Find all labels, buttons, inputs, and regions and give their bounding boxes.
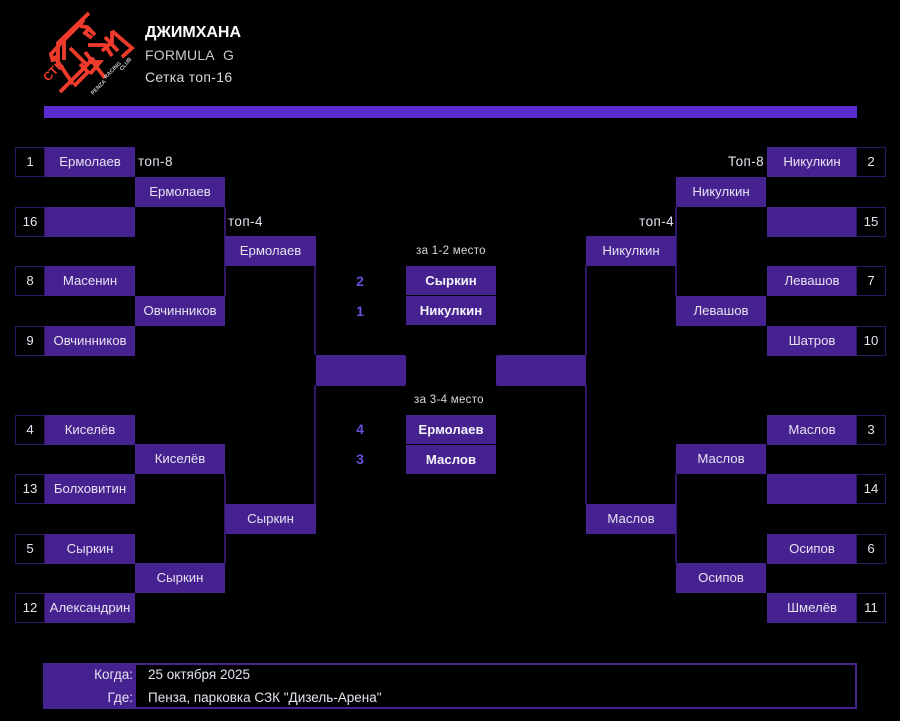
match: seed 7: Левашов <box>784 273 840 288</box>
round 2 winner <box>676 444 766 474</box>
semifinalist <box>586 236 676 266</box>
finalist: Nikulkin: Никулкин <box>420 302 482 318</box>
round 2 winner <box>676 177 766 207</box>
round 2 winner <box>135 296 225 326</box>
info labels: Где: <box>107 690 133 705</box>
finalist slot left <box>316 355 406 386</box>
match: seed 2: Никулкин <box>783 154 841 169</box>
right bracket: 15 <box>864 214 878 229</box>
left bracket: Ермолаев <box>59 154 121 169</box>
match: seed 12 <box>15 593 45 623</box>
left bracket: Масенин <box>63 273 117 288</box>
place 3: 3 <box>356 451 364 467</box>
finalist: Syrkin <box>406 266 496 295</box>
semifinalist <box>225 236 316 266</box>
match: seed 4: 4 <box>26 422 34 437</box>
logo: STK Penza Racing Club: RACING <box>103 61 123 80</box>
panel: final for places 1-2 <box>356 245 496 325</box>
right bracket: 7 <box>867 273 875 288</box>
match: seed 9 <box>15 326 45 356</box>
label: third place: за 3-4 место <box>414 394 484 406</box>
match: seed 1 <box>15 147 45 177</box>
match: seed 16: 16 <box>23 214 37 229</box>
match: seed 10: Шатров <box>789 333 835 348</box>
match: seed 9: 9 <box>26 333 34 348</box>
right bracket: 2 <box>867 154 875 169</box>
right bracket <box>586 147 886 623</box>
finalist: Nikulkin <box>406 296 496 325</box>
left bracket: Овчинников <box>53 333 127 348</box>
bracket connector lines right <box>675 207 677 563</box>
match: seed 3 <box>767 415 857 445</box>
info labels: Когда: <box>94 667 133 682</box>
match: seed 6: Осипов <box>789 541 835 556</box>
round 2 winner <box>676 296 766 326</box>
place 1: 1 <box>356 303 364 319</box>
semifinalist <box>586 504 676 534</box>
place 2: 2 <box>356 273 364 289</box>
left bracket: Киселёв <box>65 422 115 437</box>
round 2 winner <box>135 563 225 593</box>
match: seed 7 <box>767 266 857 296</box>
match: seed 14 <box>767 474 857 504</box>
semifinalist <box>225 504 316 534</box>
round 2 winner: Сыркин <box>157 570 203 585</box>
logo: STK Penza Racing Club: PENZA <box>90 79 108 96</box>
left bracket: Сыркин <box>67 541 113 556</box>
place 4: 4 <box>356 421 364 437</box>
panel: event info <box>43 663 857 709</box>
round 2 winner <box>676 563 766 593</box>
semifinalist: Сыркин <box>247 511 294 526</box>
match: seed 13: 13 <box>23 481 37 496</box>
label: top-8: Топ-8 <box>728 154 764 169</box>
match: seed 8: 8 <box>26 273 34 288</box>
match: seed 5: 5 <box>26 541 34 556</box>
label: final: за 1-2 место <box>416 245 486 257</box>
match: seed 15 <box>767 207 857 237</box>
match: seed 2 <box>767 147 857 177</box>
match: seed 3: Маслов <box>788 422 836 437</box>
right bracket: 14 <box>864 481 878 496</box>
venue: Пенза, парковка СЗК "Дизель-Арена" <box>148 690 382 705</box>
match: seed 13 <box>15 474 45 504</box>
subtitle: FORMULA G <box>145 47 234 63</box>
round 2 winner <box>135 444 225 474</box>
finalist: Ermolaev <box>406 415 496 444</box>
round 2 winner: Никулкин <box>692 184 750 199</box>
right bracket: 6 <box>867 541 875 556</box>
match: seed 1: 1 <box>26 154 34 169</box>
label: top-4: топ-4 <box>639 214 674 229</box>
match: seed 10 <box>767 326 857 356</box>
match: seed 5 <box>15 534 45 564</box>
panel: match for places 3-4 <box>356 394 496 474</box>
match: seed 16 <box>15 207 45 237</box>
logo: STK Penza Racing Club <box>40 12 135 96</box>
label: top-8: топ-8 <box>138 154 173 169</box>
match: seed 6 <box>767 534 857 564</box>
logo: STK Penza Racing Club: CLUB <box>119 57 133 72</box>
semifinalist: Никулкин <box>602 243 660 258</box>
match: seed 11 <box>767 593 857 623</box>
match: seed 4 <box>15 415 45 445</box>
right bracket: 10 <box>864 333 878 348</box>
label: top-4: топ-4 <box>228 214 263 229</box>
right bracket: 11 <box>864 600 878 615</box>
match: seed 11: Шмелёв <box>787 600 837 615</box>
finalist: Maslov <box>406 445 496 474</box>
round 2 winner: Ермолаев <box>149 184 211 199</box>
semifinalist: Ермолаев <box>240 243 301 258</box>
finalist: Maslov: Маслов <box>426 452 476 466</box>
finalist: Syrkin: Сыркин <box>425 272 477 288</box>
bracket description: Сетка топ-16 <box>145 69 232 85</box>
finalist slot right <box>496 355 586 386</box>
info labels <box>44 664 136 708</box>
round 2 winner: Киселёв <box>155 451 205 466</box>
round 2 winner: Осипов <box>698 570 744 585</box>
left bracket: Болховитин <box>54 481 126 496</box>
left bracket <box>15 147 316 623</box>
match: seed 8 <box>15 266 45 296</box>
round 2 winner: Левашов <box>693 303 749 318</box>
left bracket: Александрин <box>50 600 130 615</box>
round 2 winner: Овчинников <box>143 303 217 318</box>
round 2 winner <box>135 177 225 207</box>
match: seed 12: 12 <box>23 600 37 615</box>
logo: STK Penza Racing Club: СТК <box>40 57 67 84</box>
title block <box>145 24 241 85</box>
semifinalist: Маслов <box>607 511 655 526</box>
header bar <box>44 106 857 118</box>
title: ДЖИМХАНА <box>145 24 241 41</box>
finalist: Ermolaev: Ермолаев <box>418 422 484 436</box>
round 2 winner: Маслов <box>697 451 745 466</box>
bracket connector lines <box>224 207 587 563</box>
right bracket: 3 <box>867 422 875 437</box>
date: 25 октября 2025 <box>148 667 250 682</box>
